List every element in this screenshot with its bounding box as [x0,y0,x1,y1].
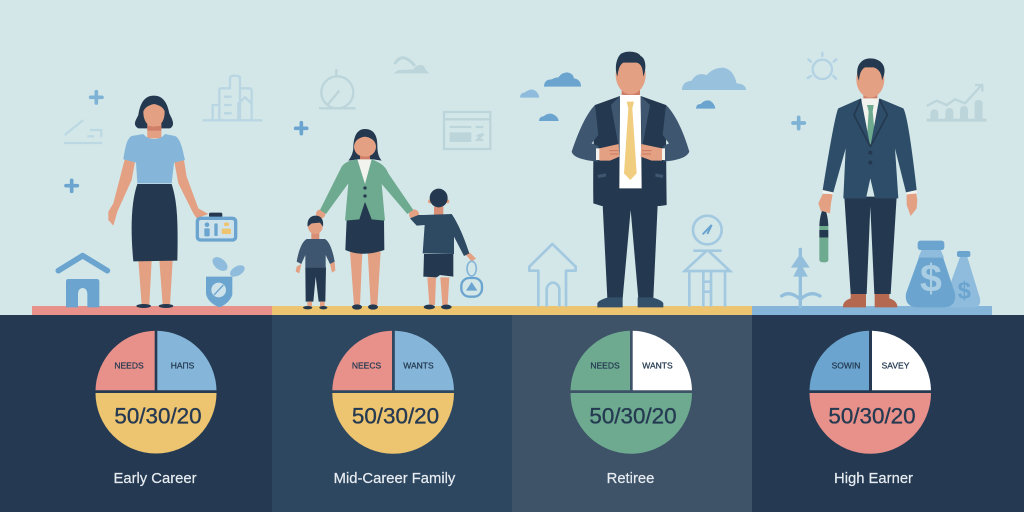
ground strip: mid-career and retiree [272,306,752,316]
pie chart: early career: 50/30/20 [114,403,202,428]
icon: keychain tag [461,261,482,297]
icon: small money bag: $ [958,277,971,304]
icon: house [58,256,107,307]
icon: small money bag [947,251,980,307]
figure: mother in green jacket [316,129,419,310]
icon: faded growth chart [927,85,987,122]
pie chart: retiree: 50/30/20 [589,403,677,428]
label: high earner: High Earner [834,471,913,487]
pie chart: early career: HAΠS [171,361,195,371]
panel: early career illustration [58,76,262,308]
pie chart: mid-career family [332,331,454,454]
pie chart: high earner: 50/30/20 [828,403,916,428]
icon: faded browser card [444,112,490,149]
icon: rolled umbrella in hand [819,205,828,262]
icon: faded city buildings [203,76,262,120]
panel: high earner illustration [782,53,987,307]
panel: mid-career family illustration [296,58,490,310]
figure: woman in blue top [108,96,208,308]
pie chart: mid-career family: NEECS [352,361,381,371]
icon: faded mountain [393,58,429,73]
ground strip: early career [32,306,272,316]
panel: mid-career family budget [272,315,512,512]
pie chart: retiree: NEEDS [590,361,620,371]
icon: faded sun [808,53,836,79]
label: mid-career family: Mid-Career Family [334,471,456,487]
icon: plus upper [91,92,102,103]
pie chart: high earner: SAVEY [882,361,910,371]
icon: outline house [529,244,576,307]
figure: small child [296,216,335,309]
label: retiree: Retiree [607,471,654,487]
panel: high earner budget [752,315,1024,512]
icon: outline tower with clock [685,216,730,307]
icon: faded ramp chart [64,120,102,143]
icon: plus [296,123,307,134]
icon: large money bag: $ [920,257,942,301]
icon: plant arrow [782,249,820,307]
pie chart: mid-career family: WANTS [403,361,434,371]
pie chart: retiree: WANTS [642,361,673,371]
pie chart: early career: NEEDS [114,361,144,371]
figure: man in navy suit with green tie [818,58,917,307]
icon: leaf shield [206,254,247,307]
icon: plus lower [66,180,77,191]
pie chart: early career [96,331,216,453]
pie chart: high earner [810,331,931,454]
ground strip: high earner [752,306,992,316]
icon: faded stopwatch [319,69,356,108]
figure: man in dark suit with yellow tie [572,52,689,307]
panel: retiree illustration [520,52,746,307]
icon: large money bag [906,241,955,307]
icon: briefcase [196,213,237,242]
icon: clouds [520,68,746,121]
figure: older child [410,189,476,309]
pie chart: retiree [570,331,692,454]
panel: retiree budget [512,315,752,512]
label: early career: Early Career [113,471,197,487]
pie chart: high earner: SOWIN [832,361,860,371]
icon: plus [793,117,804,129]
panel: early career budget [0,315,272,512]
pie chart: mid-career family: 50/30/20 [352,403,439,428]
